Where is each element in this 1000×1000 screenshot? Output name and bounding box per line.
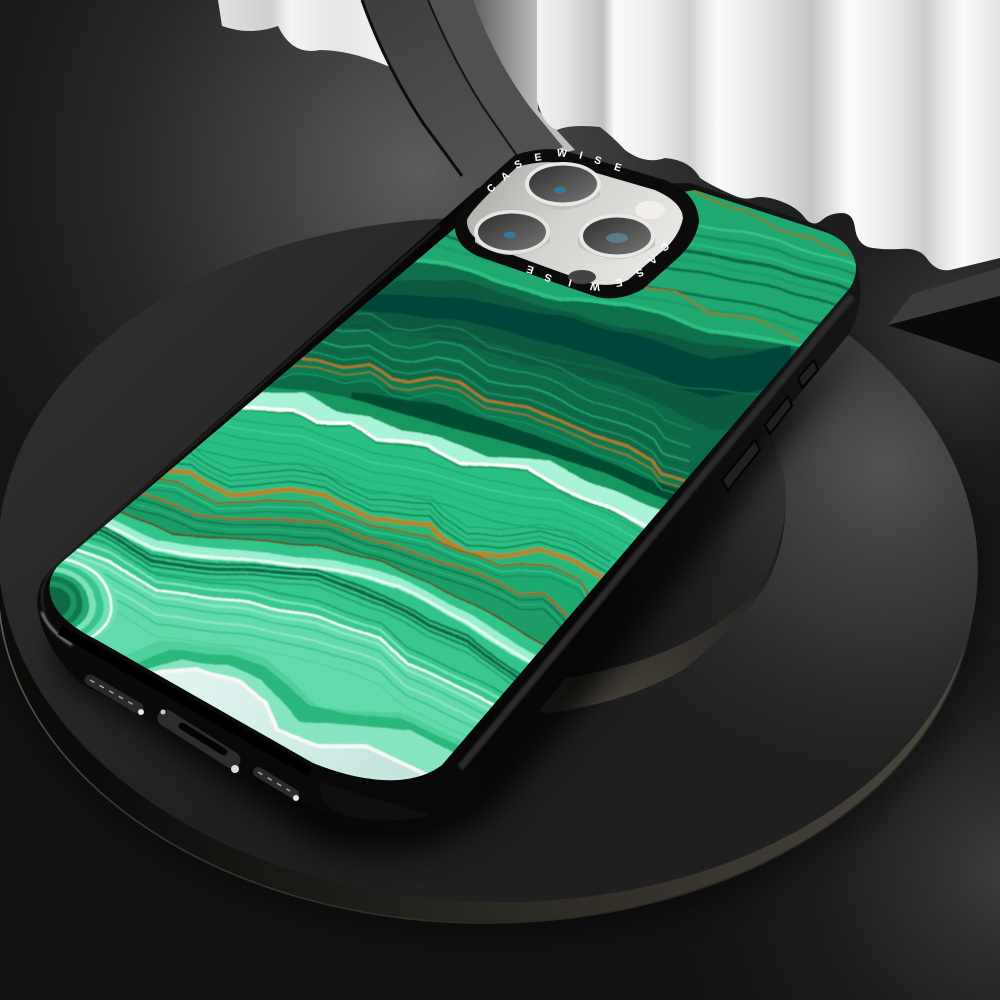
lens: left [474,210,550,255]
lens: right [578,214,655,259]
gold vein one [299,356,686,483]
band: field below gold A [162,474,600,592]
flash [635,201,665,219]
phone: case body [37,183,860,832]
brand text upper: S [593,154,603,167]
corner concentric strata [50,557,118,639]
white blob bottom [158,670,422,780]
brand text lower: W [589,280,601,293]
brand text upper: S [513,158,524,172]
brand text upper: I [578,150,584,162]
curtain: upper left [218,0,390,67]
back right wedge block [888,268,1000,363]
lens: top [525,162,601,210]
sensor [568,270,596,284]
brand text lower [525,239,671,293]
brand text upper [485,147,623,196]
phone: speaker port left [90,680,144,715]
gold vein two [166,468,605,580]
brand text upper: C [485,181,499,196]
band: bright green field [171,410,644,576]
phone: side buttons [722,360,818,490]
band: below gold D and mint ribbon [101,512,544,676]
band: green rings above blob [126,640,462,746]
brand text upper: A [499,169,512,184]
brand text lower: S [634,265,645,279]
brand text lower: I [567,276,573,288]
phone: speaker port right [258,772,299,801]
band: below first gold vein [283,360,684,486]
band: medium green above white strip [240,386,669,530]
brand text lower: C [657,239,671,254]
brand text upper: W [556,147,568,160]
second platform tier [400,350,786,713]
phone: malachite back panel [50,190,856,780]
phone: camera bumper [455,147,699,298]
band: field below gold B [143,480,588,616]
phone shadow [60,340,860,853]
band: upper stripes and gold hairlines [434,190,856,342]
phone: charging port [160,710,239,773]
brand text upper: E [613,161,623,174]
brand text lower: A [646,252,659,267]
band: top stripe and dark core [389,262,800,350]
band: field below gold C [122,496,567,644]
round display platform [0,201,990,938]
brand text lower: E [614,276,623,289]
band: white line and pale field [68,550,492,741]
brand text lower: S [543,271,553,284]
brand text upper: E [534,151,542,164]
white strip [230,393,665,540]
curtain: upper right pleats [537,0,1000,270]
band: stripes above gold vein [302,328,728,480]
curved arch stand [362,0,575,185]
brand text lower: E [525,263,535,276]
